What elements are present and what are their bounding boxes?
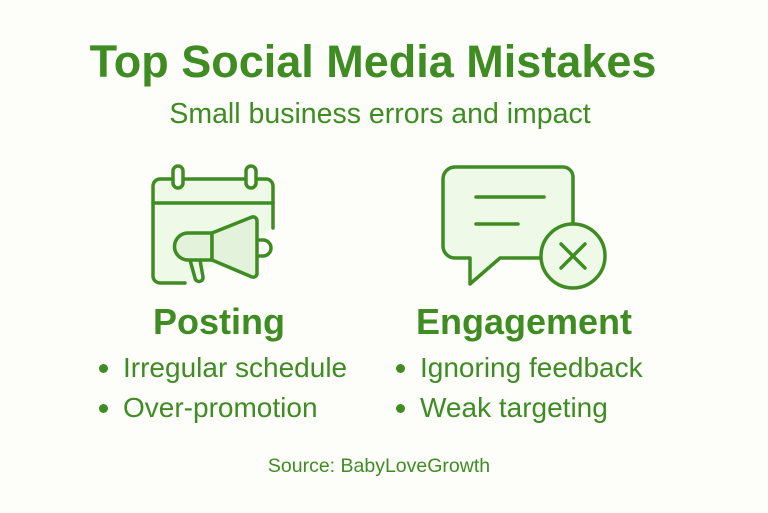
icon: chat with x [441,165,607,290]
title: Top Social Media Mistakes [90,36,656,87]
icon: calendar megaphone [151,164,275,285]
list: posting: Irregular schedule [123,352,347,383]
list: engagement: Weak targeting [420,392,608,423]
list: engagement: Ignoring feedback [420,352,643,383]
list: posting: Over-promotion [123,392,318,423]
subtitle: Small business errors and impact [169,98,591,130]
list: engagement [396,352,643,423]
list: posting [99,352,347,423]
source: Source: BabyLoveGrowth [268,455,490,477]
heading: Engagement: Engagement [416,301,632,342]
heading: Posting: Posting [153,301,285,342]
